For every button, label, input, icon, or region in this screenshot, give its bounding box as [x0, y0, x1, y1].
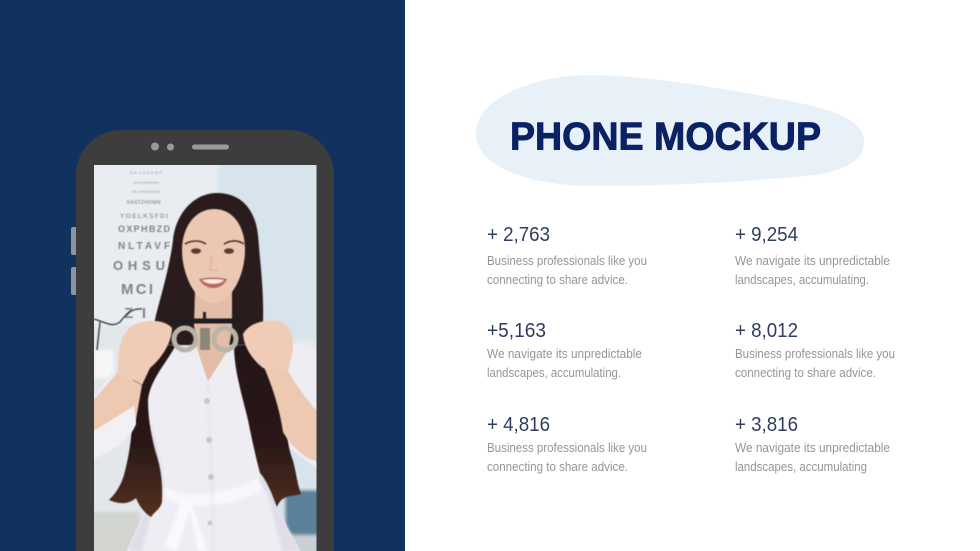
neck and chest [194, 290, 232, 382]
photo background [90, 160, 320, 551]
eye chart letters: OXPHBZD [118, 224, 170, 234]
panel: content [476, 75, 895, 474]
right arm [263, 365, 318, 462]
stat 3 [487, 320, 642, 380]
face [182, 209, 245, 303]
stat 3: We navigate its unpredictable [487, 346, 642, 361]
title: PHONE MOCKUP [510, 116, 821, 158]
trial frame glasses [172, 312, 240, 350]
eyes and brows [185, 241, 244, 288]
left hand [118, 321, 172, 385]
eye chart letters: YOELKSFDI [120, 213, 168, 220]
stat 4: + 8,012 [735, 320, 798, 342]
stat 6: + 3,816 [735, 414, 798, 436]
back hair [150, 193, 264, 345]
dress shading and belt [130, 479, 298, 551]
stat 6 [735, 414, 890, 474]
stat 4 [735, 320, 895, 380]
eye chart letters: XAATZHOWN [126, 200, 161, 206]
stat 4: connecting to share advice. [735, 365, 876, 380]
right sleeve back [288, 342, 316, 469]
stat 2: landscapes, accumulating. [735, 272, 869, 287]
stat 2 [735, 224, 890, 287]
eye chart letters: MCI [121, 281, 153, 298]
dress [125, 345, 302, 551]
eye chart letters [113, 170, 170, 322]
right hand [243, 320, 293, 370]
eye chart letters: ZI [124, 305, 146, 322]
phone mockup [71, 130, 334, 551]
left navy panel [0, 0, 405, 551]
stat 1: Business professionals like you [487, 253, 647, 268]
stat 5 [487, 414, 647, 474]
stat 5: + 4,816 [487, 414, 550, 436]
stat 1: + 2,763 [487, 224, 550, 246]
eye chart letters: NLTAVF [118, 241, 170, 252]
eye chart letters: NLTSHZMKRV [132, 189, 160, 194]
icon: phone side buttons [71, 227, 77, 295]
eye chart letters: NKUSDRMP [130, 170, 162, 175]
stat 3: landscapes, accumulating. [487, 365, 621, 380]
phone body [76, 130, 334, 551]
phone screen photo: optician holding trial frame [90, 160, 320, 551]
eye chart letters: OHSU [113, 258, 165, 273]
left arm and sleeve cuff [92, 372, 142, 432]
stat 2: + 9,254 [735, 224, 798, 246]
dress buttons [204, 398, 214, 526]
stat 2: We navigate its unpredictable [735, 253, 890, 268]
stat 6: We navigate its unpredictable [735, 440, 890, 455]
stat 4: Business professionals like you [735, 346, 895, 361]
phone camera and speaker [151, 142, 229, 150]
eye chart cable [94, 309, 142, 350]
eye chart letters: SVUEWSXPD [133, 180, 159, 185]
stat 6: landscapes, accumulating [735, 459, 867, 474]
stat 1: connecting to share advice. [487, 272, 628, 287]
left sleeve back [94, 375, 111, 399]
stat 1 [487, 224, 647, 287]
stat 5: connecting to share advice. [487, 459, 628, 474]
stat 3: +5,163 [487, 320, 546, 342]
stat 5: Business professionals like you [487, 440, 647, 455]
long hair left [109, 345, 176, 517]
long hair right [234, 345, 301, 507]
title blob [476, 75, 864, 186]
left cuff [92, 406, 136, 459]
